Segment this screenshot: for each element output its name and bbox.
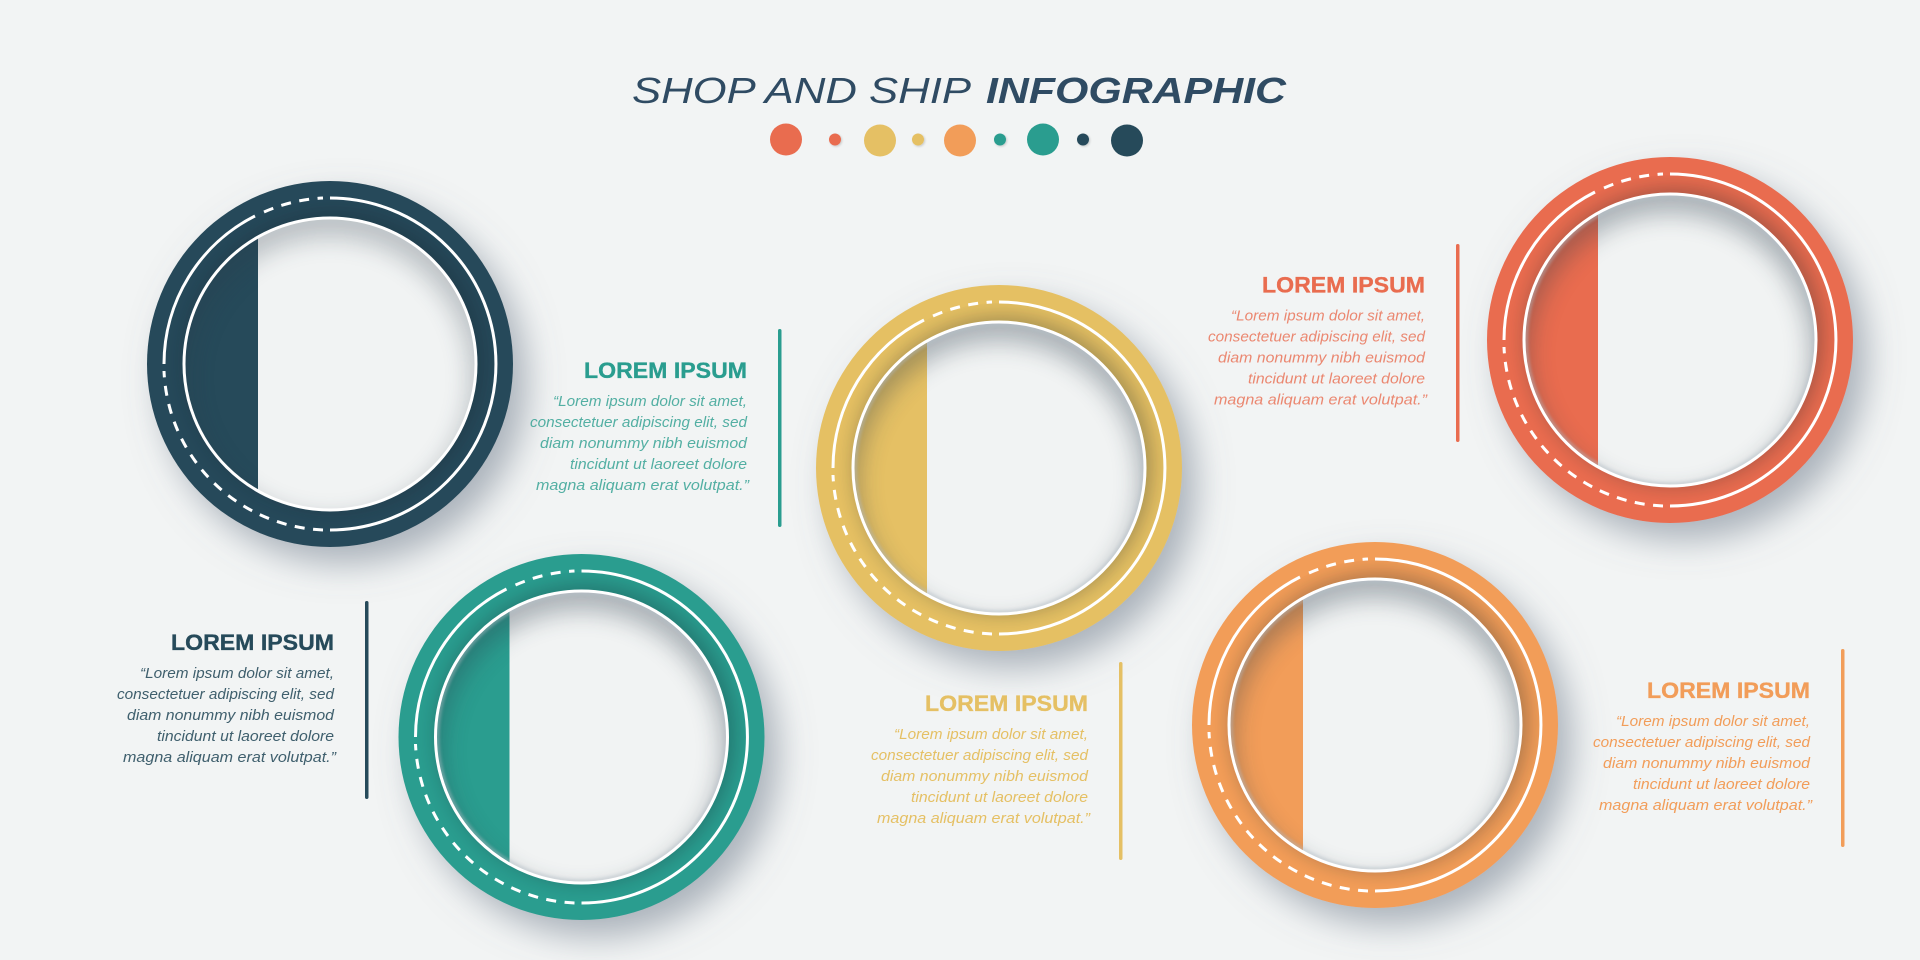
text block: orange: magna aliquam erat volutpat.” <box>1599 798 1813 814</box>
text block: red: “Lorem ipsum dolor sit amet, <box>1231 308 1425 324</box>
circle: orange <box>1192 542 1558 908</box>
title: SHOP AND SHIP <box>632 70 971 111</box>
text block: dark navy: “Lorem ipsum dolor sit amet, <box>140 666 334 682</box>
text block: orange: consectetuer adipiscing elit, sed <box>1593 735 1811 751</box>
circle: dark navy <box>147 181 513 547</box>
text block: orange: LOREM IPSUM <box>1647 678 1810 703</box>
title <box>632 70 1287 111</box>
circle: yellow <box>816 285 1182 651</box>
text block: dark navy: tincidunt ut laoreet dolore <box>157 729 334 745</box>
text block: teal: magna aliquam erat volutpat.” <box>536 478 750 494</box>
text block: orange <box>1593 649 1844 847</box>
text block: red: diam nonummy nibh euismod <box>1218 350 1426 366</box>
text block: teal: “Lorem ipsum dolor sit amet, <box>553 394 747 410</box>
circle: teal <box>398 554 764 920</box>
text block: orange: tincidunt ut laoreet dolore <box>1633 777 1810 793</box>
text block: yellow <box>871 662 1122 860</box>
text block: red <box>1208 244 1460 442</box>
text block: yellow: LOREM IPSUM <box>925 691 1088 716</box>
text block: teal <box>530 329 782 527</box>
text block: red: magna aliquam erat volutpat.” <box>1214 392 1428 408</box>
text block: teal: LOREM IPSUM <box>584 358 747 383</box>
text block: orange: “Lorem ipsum dolor sit amet, <box>1616 714 1810 730</box>
text block: teal: tincidunt ut laoreet dolore <box>570 457 747 473</box>
text block: yellow: “Lorem ipsum dolor sit amet, <box>894 727 1088 743</box>
circle: red <box>1487 157 1853 523</box>
text block: yellow: magna aliquam erat volutpat.” <box>877 811 1091 827</box>
text block: red: tincidunt ut laoreet dolore <box>1248 372 1425 388</box>
text block: red: LOREM IPSUM <box>1262 272 1425 298</box>
text block: orange: diam nonummy nibh euismod <box>1603 756 1811 772</box>
text block: dark navy: LOREM IPSUM <box>171 630 334 655</box>
text block: yellow: tincidunt ut laoreet dolore <box>911 790 1088 806</box>
text block: red: consectetuer adipiscing elit, sed <box>1208 330 1426 346</box>
text block: dark navy: magna aliquam erat volutpat.” <box>123 750 337 766</box>
text block: dark navy <box>117 601 368 799</box>
text block: dark navy: diam nonummy nibh euismod <box>127 708 335 724</box>
text block: teal: consectetuer adipiscing elit, sed <box>530 415 748 431</box>
text block: yellow: diam nonummy nibh euismod <box>881 769 1089 785</box>
text block: teal: diam nonummy nibh euismod <box>540 436 748 452</box>
text block: dark navy: consectetuer adipiscing elit, sed <box>117 687 335 703</box>
title: INFOGRAPHIC <box>986 70 1287 111</box>
text block: yellow: consectetuer adipiscing elit, sed <box>871 748 1089 764</box>
dot row <box>770 124 1143 156</box>
